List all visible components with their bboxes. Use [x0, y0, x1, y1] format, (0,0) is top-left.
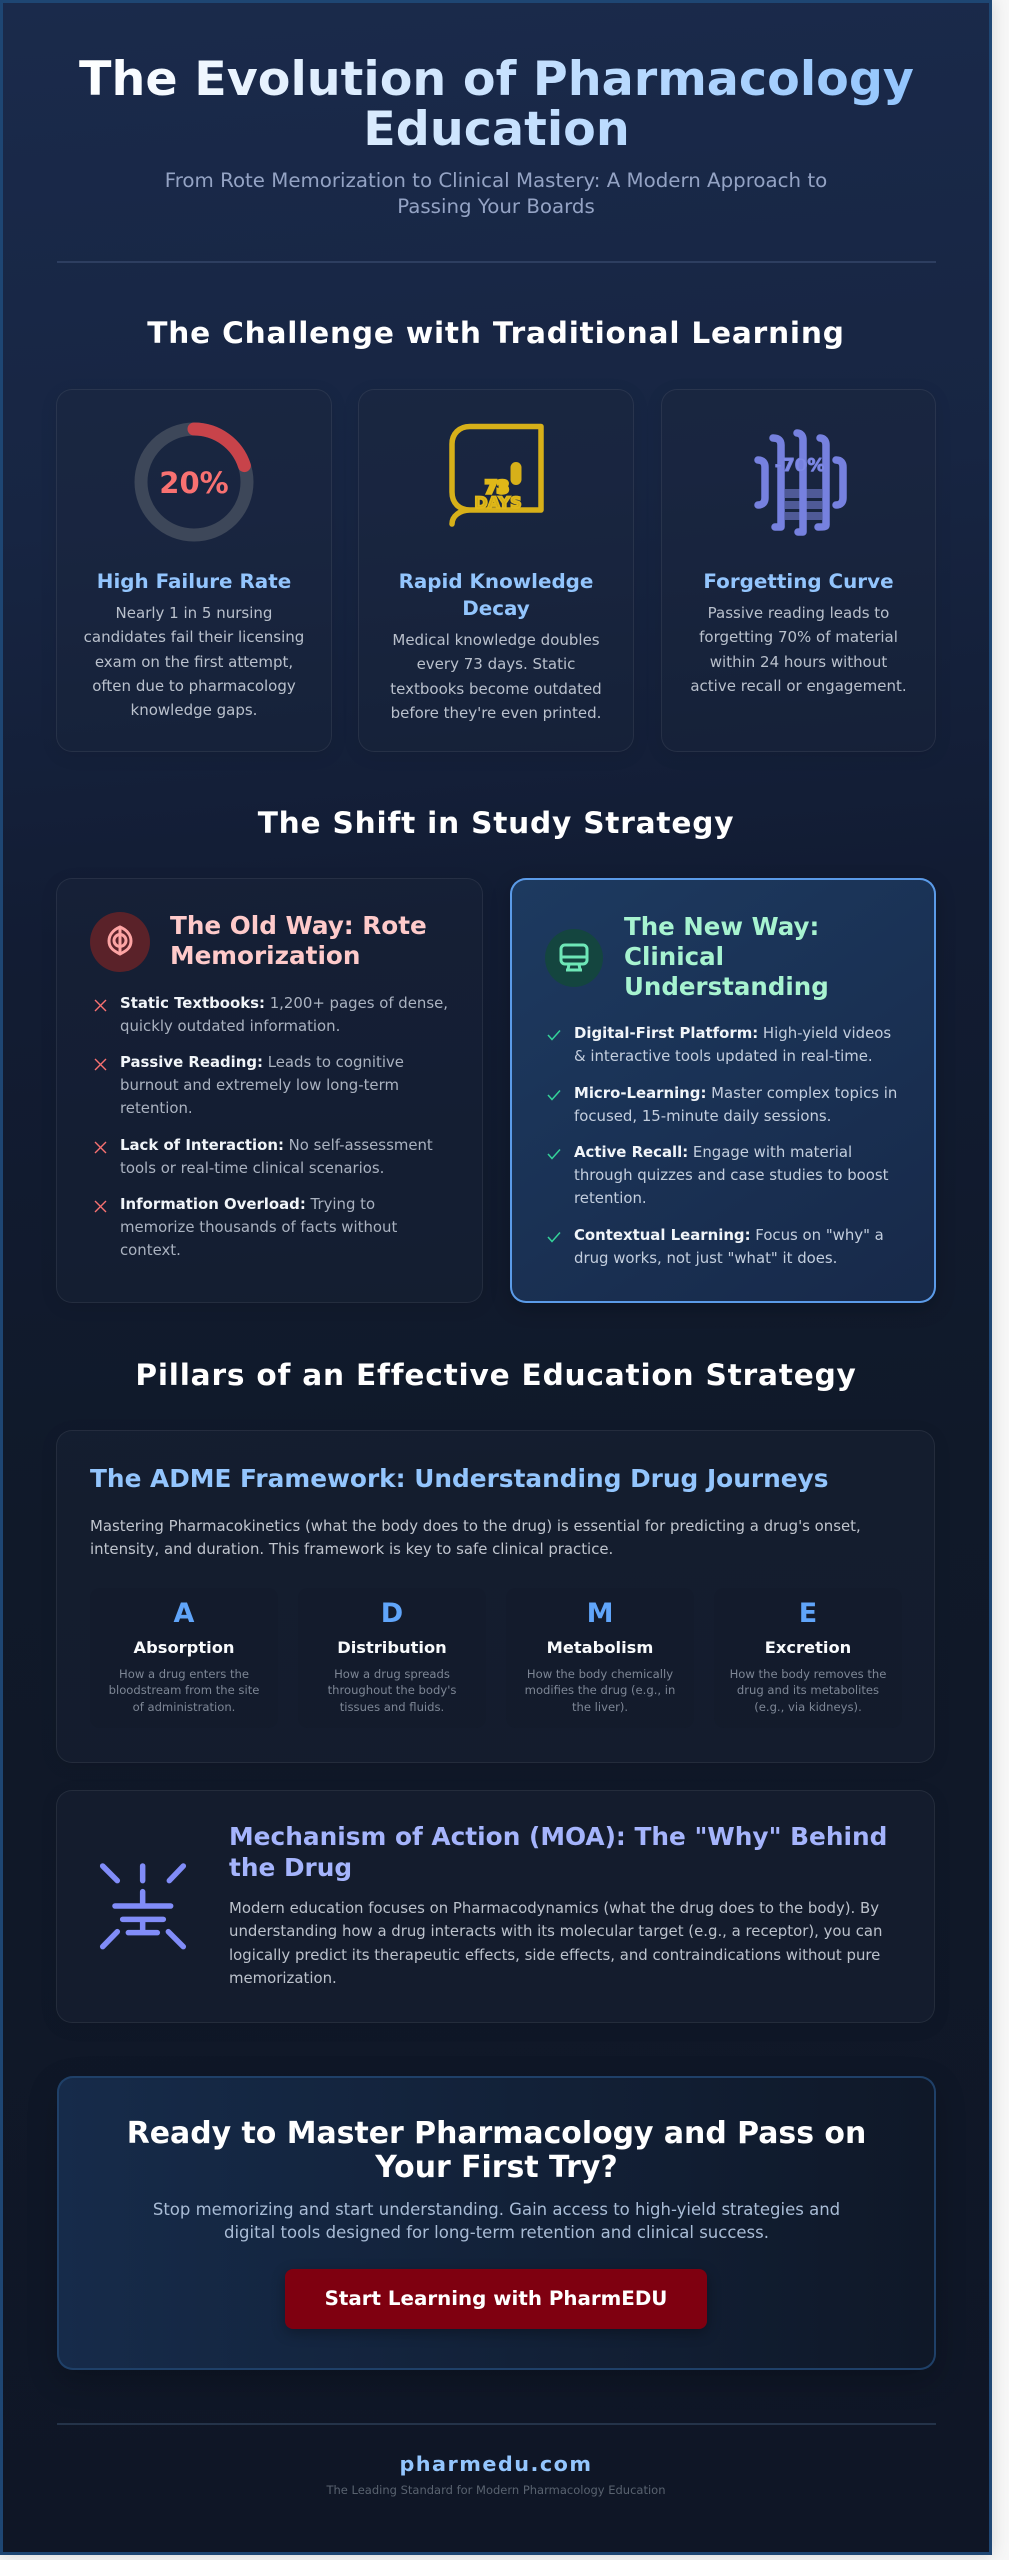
- letter: M: [587, 1598, 613, 1629]
- icon: check: [548, 1090, 560, 1100]
- icon: cross: [94, 1058, 106, 1070]
- list item: Passive Reading: Leads to cognitive: [120, 1053, 404, 1071]
- list item: focused, 15-minute daily sessions.: [574, 1107, 831, 1125]
- panel: mechanism of action: [56, 1790, 935, 2023]
- icon: cross: [94, 1142, 106, 1154]
- panel text: understanding how a drug interacts with its molecular target (e.g., a receptor), you can: [229, 1922, 882, 1940]
- panel text: memorization.: [229, 1969, 337, 1987]
- icon: calendar speech bubble with 73 days: 73: [485, 478, 509, 498]
- card heading: Decay: [462, 597, 530, 620]
- list item: retention.: [120, 1099, 193, 1117]
- list item: [574, 1143, 888, 1207]
- list item: context.: [120, 1241, 181, 1259]
- letter: D: [381, 1598, 403, 1629]
- icon: 20 percent ring: 20%: [159, 466, 229, 500]
- icon: check: [548, 1149, 560, 1160]
- panel text: Mastering Pharmacokinetics (what the body does to the drug) is essential for predicting a drug's onset,: [90, 1517, 861, 1535]
- card: distribution: [298, 1588, 486, 1728]
- panel text: Modern education focuses on Pharmacodynamics (what the drug does to the body). By: [229, 1899, 879, 1917]
- name: Absorption: [134, 1638, 234, 1657]
- icon: check: [548, 1030, 560, 1040]
- card text: [84, 604, 304, 719]
- panel: high failure rate: [56, 389, 332, 752]
- icon: new way monitor: [545, 929, 603, 987]
- card: metabolism: [506, 1588, 694, 1728]
- card text: every 73 days. Static: [417, 655, 575, 673]
- card text: within 24 hours without: [710, 653, 887, 671]
- panel: ADME framework: [56, 1430, 935, 1763]
- card text: Passive reading leads to: [708, 604, 889, 622]
- panel heading: The ADME Framework: Understanding Drug Journeys: [90, 1464, 828, 1493]
- panel heading: Mechanism of Action (MOA): The "Why" Behind: [229, 1822, 887, 1851]
- description: How the body chemically: [527, 1667, 673, 1681]
- cta heading: Your First Try?: [375, 2150, 618, 2184]
- list item: Contextual Learning: Focus on "why" a: [574, 1226, 884, 1244]
- description: throughout the body's: [328, 1683, 456, 1697]
- heading: the challenge: The Challenge with Traditional Learning: [147, 316, 845, 350]
- card text: active recall or engagement.: [690, 677, 907, 695]
- list item: [120, 1195, 397, 1259]
- panel heading: [170, 911, 427, 970]
- card text: knowledge gaps.: [131, 701, 257, 719]
- list item: [574, 1226, 884, 1267]
- panel text: logically predict its therapeutic effects, side effects, and contraindications without pure: [229, 1946, 880, 1964]
- heading: pillars: Pillars of an Effective Education Strategy: [135, 1358, 857, 1392]
- icon: calendar speech bubble with 73 days: DAYS: [474, 493, 522, 512]
- panel heading: The New Way:: [624, 912, 819, 941]
- panel: call to action: [57, 2076, 936, 2370]
- card text: [390, 631, 602, 722]
- panel: rapid knowledge decay: [358, 389, 634, 752]
- card text: Medical knowledge doubles: [392, 631, 600, 649]
- panel text: intensity, and duration. This framework is key to safe clinical practice.: [90, 1540, 613, 1558]
- list item: & interactive tools updated in real-time.: [574, 1047, 873, 1065]
- letter: E: [799, 1598, 817, 1629]
- panel heading: The Old Way: Rote: [170, 911, 427, 940]
- list item: Active Recall: Engage with material: [574, 1143, 852, 1161]
- list item: [574, 1084, 897, 1125]
- icon: cross: [94, 1200, 106, 1212]
- list item: [120, 1053, 404, 1117]
- icon: cross: [94, 1000, 106, 1012]
- icon: forgetting curve bars: [754, 429, 847, 536]
- title: The Evolution of Pharmacology: [79, 52, 914, 107]
- list item: [120, 1136, 433, 1177]
- card text: forgetting 70% of material: [699, 628, 898, 646]
- panel heading: Clinical: [624, 942, 724, 971]
- description: How the body removes the: [730, 1667, 886, 1681]
- card heading: High Failure Rate: [97, 570, 291, 593]
- card heading: Rapid Knowledge: [399, 570, 593, 593]
- subtitle: [165, 169, 827, 218]
- description: How a drug enters the: [119, 1667, 249, 1681]
- icon: receptor burst: [100, 1863, 186, 1950]
- description: [730, 1667, 886, 1714]
- cta heading: [127, 2116, 866, 2184]
- button: Start Learning with PharmEDU: [325, 2287, 667, 2310]
- card text: before they're even printed.: [391, 704, 601, 722]
- panel heading: the Drug: [229, 1853, 352, 1882]
- card heading: Forgetting Curve: [703, 570, 894, 593]
- title: [79, 55, 914, 155]
- panel: the new way: [510, 878, 936, 1303]
- description: drug and its metabolites: [737, 1683, 879, 1697]
- description: How a drug spreads: [334, 1667, 450, 1681]
- panel: the old way: [56, 878, 483, 1303]
- name: Metabolism: [547, 1638, 653, 1657]
- name: Excretion: [765, 1638, 851, 1657]
- card text: often due to pharmacology: [92, 677, 296, 695]
- card heading: [399, 570, 593, 620]
- cta text: digital tools designed for long-term retention and clinical success.: [224, 2223, 769, 2242]
- subtitle: From Rote Memorization to Clinical Mastery: A Modern Approach to: [165, 169, 827, 192]
- list item: Digital-First Platform: High-yield videos: [574, 1024, 891, 1042]
- list item: through quizzes and case studies to boost: [574, 1166, 888, 1184]
- icon: 20 percent ring: [134, 422, 254, 542]
- cta text: Stop memorizing and start understanding. Gain access to high-yield strategies and: [153, 2200, 840, 2219]
- list item: drug works, not just "what" it does.: [574, 1249, 837, 1267]
- cta text: [153, 2200, 840, 2242]
- footer brand: pharmedu.com: [399, 2452, 593, 2476]
- button: [285, 2269, 707, 2329]
- panel heading: [624, 912, 829, 1001]
- card text: Nearly 1 in 5 nursing: [116, 604, 272, 622]
- list item: Lack of Interaction: No self-assessment: [120, 1136, 433, 1154]
- panel heading: Understanding: [624, 972, 829, 1001]
- icon: calendar speech bubble with 73 days: [449, 424, 544, 527]
- card text: candidates fail their licensing: [84, 628, 304, 646]
- description: tissues and fluids.: [340, 1700, 444, 1714]
- footer tagline: The Leading Standard for Modern Pharmacology Education: [326, 2483, 666, 2497]
- card text: exam on the first attempt,: [95, 653, 293, 671]
- description: [328, 1667, 456, 1714]
- list item: Static Textbooks: 1,200+ pages of dense,: [120, 994, 448, 1012]
- list item: Information Overload: Trying to: [120, 1195, 375, 1213]
- list item: memorize thousands of facts without: [120, 1218, 397, 1236]
- heading: the shift: The Shift in Study Strategy: [258, 806, 734, 840]
- icon: old way brain: [90, 912, 150, 972]
- name: Distribution: [337, 1638, 447, 1657]
- description: bloodstream from the site: [109, 1683, 259, 1697]
- title: Education: [363, 102, 630, 157]
- icon: forgetting curve bars: -70%: [775, 455, 825, 476]
- panel heading: Memorization: [170, 941, 360, 970]
- card: excretion: [714, 1588, 902, 1728]
- subtitle: Passing Your Boards: [397, 195, 595, 218]
- description: modifies the drug (e.g., in: [525, 1683, 675, 1697]
- description: (e.g., via kidneys).: [754, 1700, 862, 1714]
- list item: burnout and extremely low long-term: [120, 1076, 399, 1094]
- panel heading: [229, 1822, 887, 1882]
- letter: A: [174, 1598, 194, 1629]
- panel: forgetting curve: [661, 389, 936, 752]
- description: [109, 1667, 259, 1714]
- list item: [574, 1024, 891, 1065]
- card text: textbooks become outdated: [390, 680, 602, 698]
- list item: quickly outdated information.: [120, 1017, 340, 1035]
- list item: Micro-Learning: Master complex topics in: [574, 1084, 897, 1102]
- cta heading: Ready to Master Pharmacology and Pass on: [127, 2116, 866, 2151]
- card text: [690, 604, 907, 695]
- panel text: [90, 1517, 861, 1558]
- description: of administration.: [133, 1700, 235, 1714]
- card: absorption: [90, 1588, 278, 1728]
- icon: check: [548, 1232, 560, 1242]
- description: the liver).: [572, 1700, 628, 1714]
- description: [525, 1667, 675, 1714]
- list item: [120, 994, 448, 1035]
- panel text: [229, 1899, 882, 1987]
- list item: retention.: [574, 1189, 647, 1207]
- list item: tools or real-time clinical scenarios.: [120, 1159, 384, 1177]
